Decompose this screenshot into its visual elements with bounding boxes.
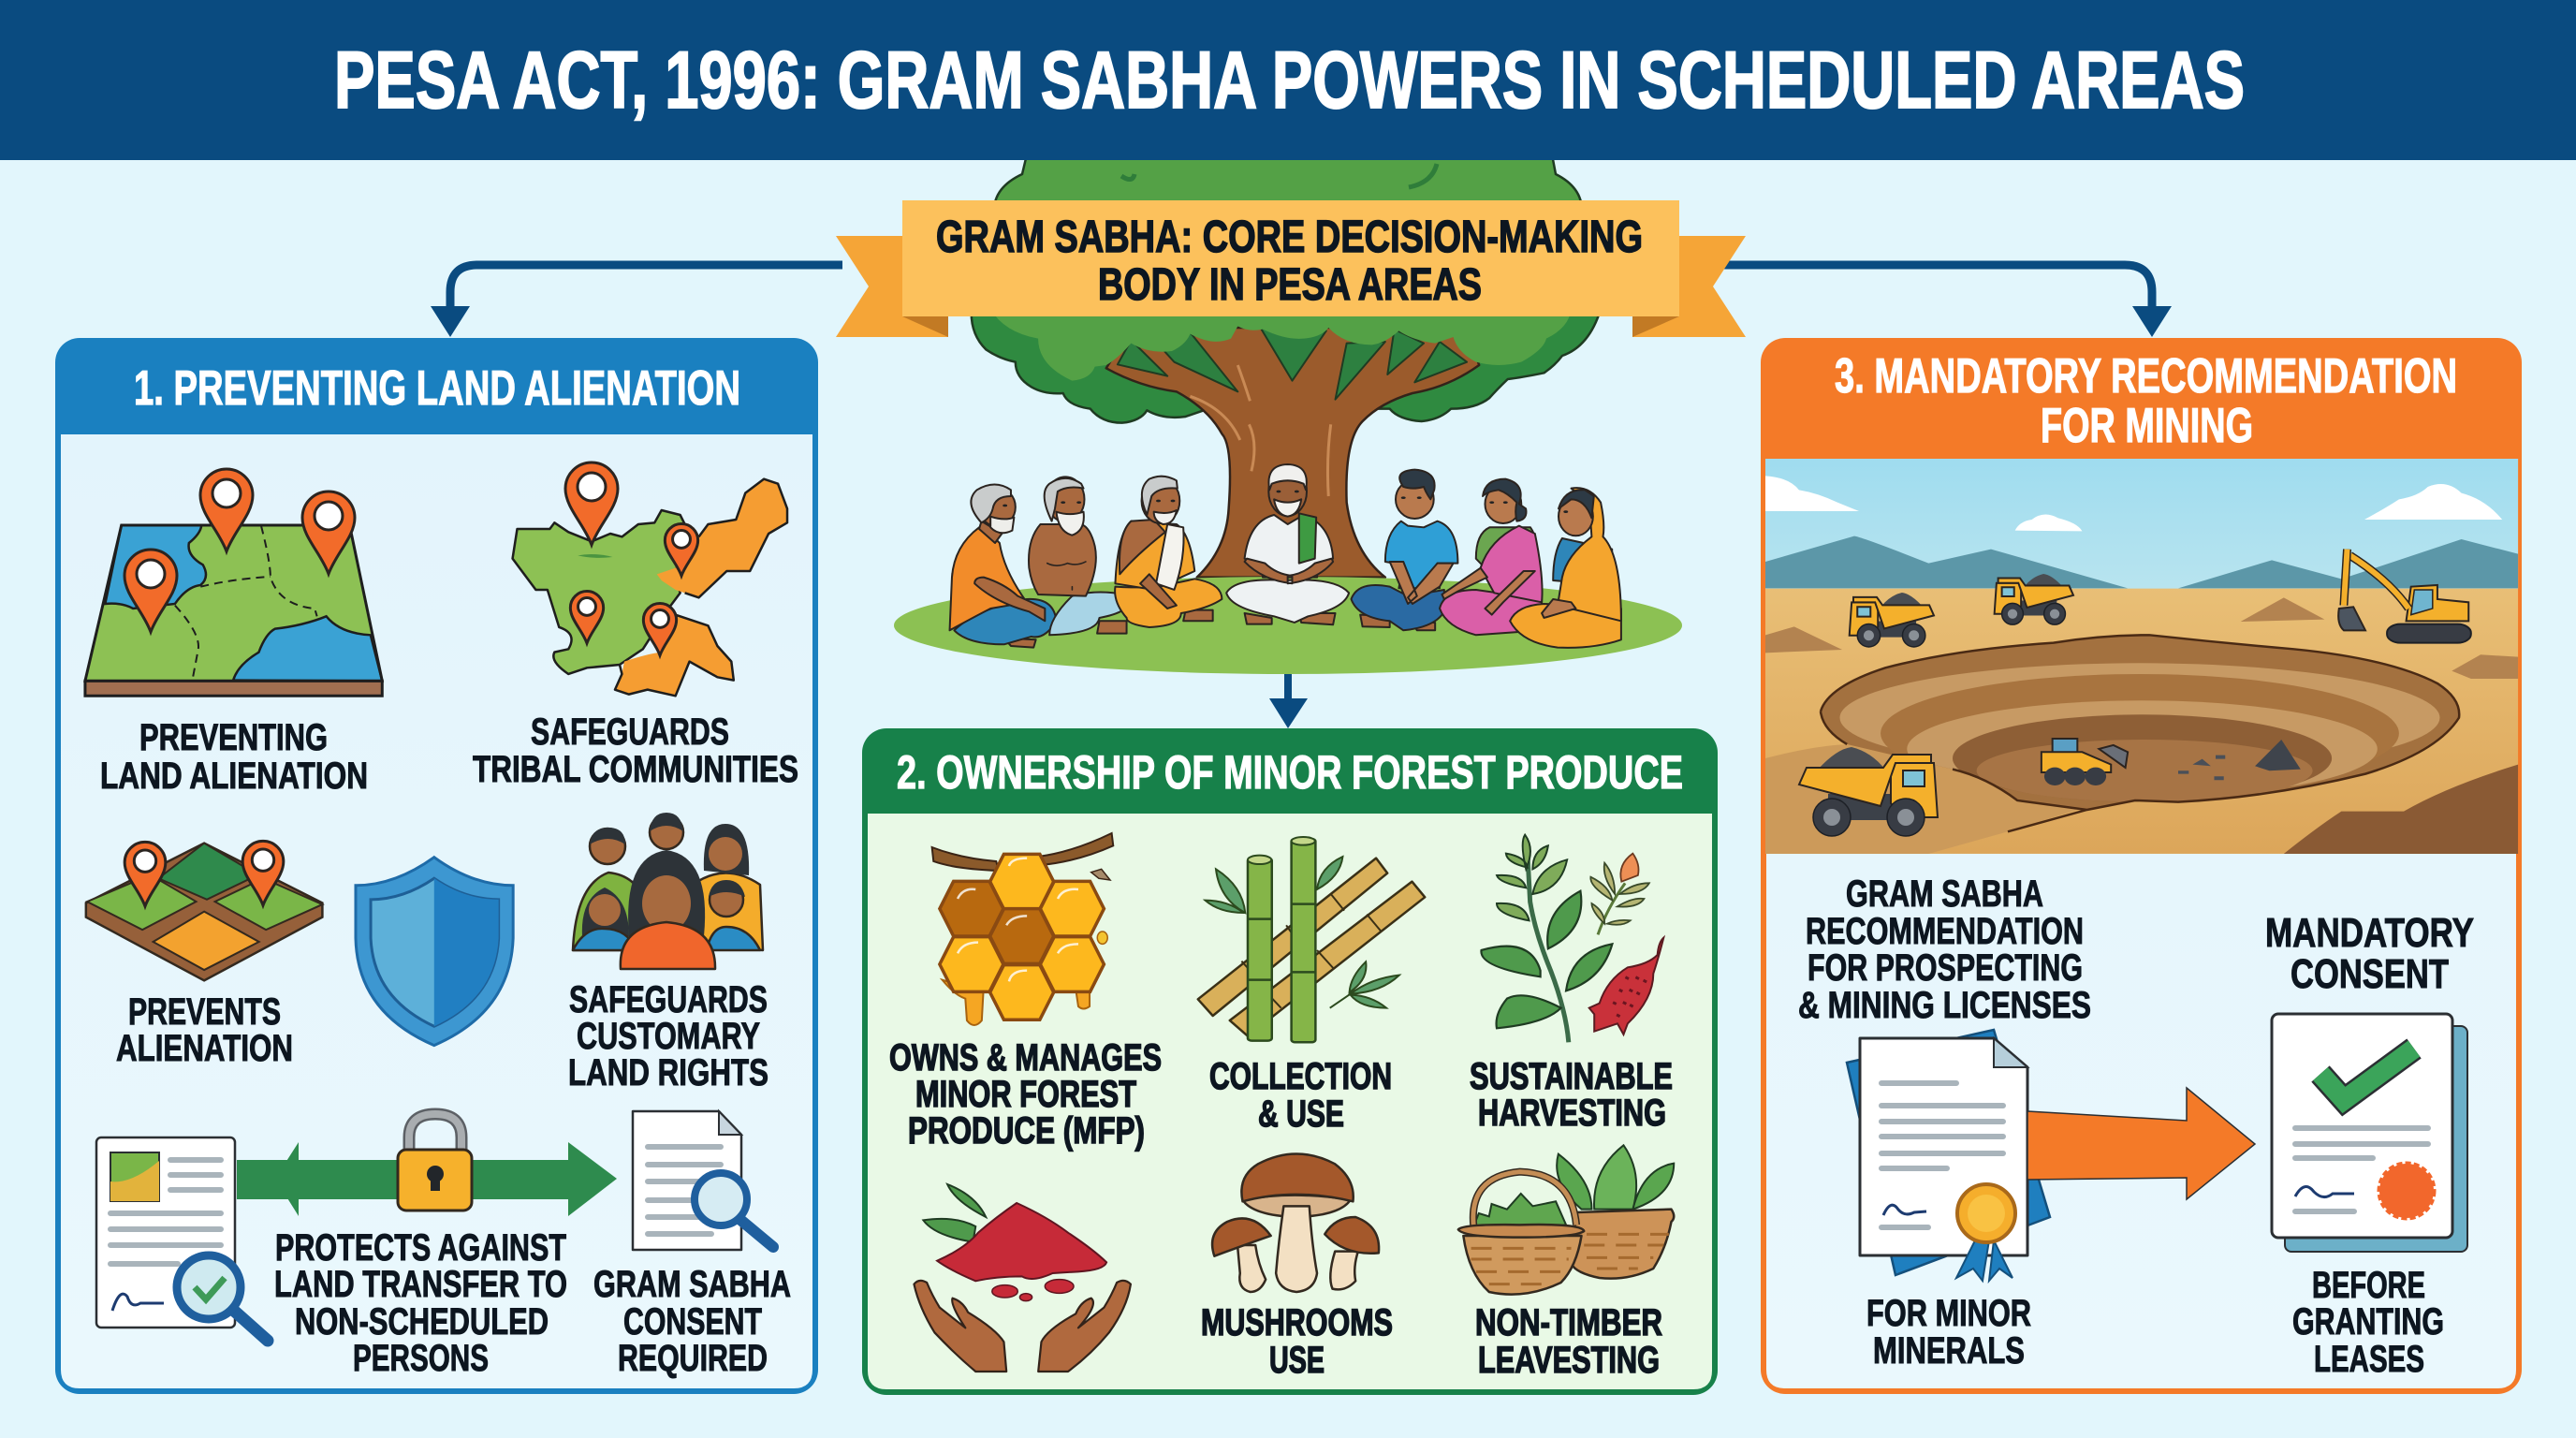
mining scene bbox=[1765, 459, 2518, 854]
excavator bbox=[2338, 550, 2471, 643]
icon: document with magnifier bbox=[633, 1111, 773, 1250]
label: sustainable harvesting: HARVESTING bbox=[1478, 1093, 1666, 1134]
panel 3 heading bbox=[1835, 349, 2457, 453]
person 5 bbox=[1352, 470, 1457, 630]
label: gram sabha recommendation: & MINING LICENSES bbox=[1798, 985, 2091, 1026]
icon: land map with pins bbox=[85, 469, 382, 696]
person 1 bbox=[950, 484, 1056, 648]
icon: land parcels with pins bbox=[86, 841, 322, 980]
label: safeguards tribal communities: SAFEGUARDS bbox=[531, 712, 729, 753]
icon: padlock bbox=[398, 1114, 472, 1211]
panel 2 heading: 2. OWNERSHIP OF MINOR FOREST PRODUCE bbox=[897, 746, 1683, 799]
hills bbox=[1765, 536, 2518, 588]
banner: BODY IN PESA AREAS bbox=[1098, 260, 1482, 310]
label: protects against land transfer: NON-SCHEDULED bbox=[295, 1301, 549, 1343]
label: safeguards customary land rights bbox=[568, 979, 768, 1093]
label: owns and manages mfp: MINOR FOREST bbox=[915, 1074, 1136, 1115]
panel 1 heading: 1. PREVENTING LAND ALIENATION bbox=[134, 361, 740, 416]
label: mushrooms use: MUSHROOMS bbox=[1201, 1302, 1393, 1343]
connector arrow down bbox=[1269, 674, 1308, 728]
label: protects against land transfer bbox=[274, 1227, 567, 1379]
icon: state map with pins bbox=[513, 462, 787, 696]
icon: shield bbox=[356, 858, 513, 1046]
label: preventing land alienation: PREVENTING bbox=[139, 717, 328, 758]
panel 1: preventing land alienation bbox=[55, 338, 818, 1394]
label: gram sabha consent required: GRAM SABHA bbox=[593, 1264, 791, 1305]
label: for minor minerals: MINERALS bbox=[1873, 1330, 2025, 1372]
mounds bbox=[1765, 597, 2518, 679]
label: gram sabha consent required bbox=[593, 1264, 791, 1379]
label: preventing land alienation bbox=[100, 717, 368, 797]
label: sustainable harvesting: SUSTAINABLE bbox=[1470, 1056, 1673, 1097]
icon: document with seal bbox=[1847, 1030, 2050, 1281]
label: safeguards customary land rights: SAFEGUARDS bbox=[569, 979, 768, 1020]
label: non-timber leavesting: NON-TIMBER bbox=[1475, 1302, 1662, 1343]
panel 3: mandatory recommendation for mining bbox=[1761, 338, 2522, 1394]
label: owns and manages mfp: PRODUCE (MFP) bbox=[908, 1110, 1145, 1152]
icon: forest plant and fruit bbox=[1481, 835, 1663, 1042]
gram sabha people group bbox=[950, 464, 1621, 648]
connector arrow left bbox=[431, 265, 842, 337]
label: protects against land transfer: PERSONS bbox=[353, 1338, 489, 1379]
label: gram sabha recommendation: FOR PROSPECTING bbox=[1808, 947, 2083, 989]
connector arrow right bbox=[1722, 265, 2172, 337]
clouds bbox=[1765, 476, 2502, 531]
person 2 bbox=[1029, 477, 1132, 635]
label: mushrooms use: USE bbox=[1269, 1340, 1325, 1381]
label: prevents alienation: ALIENATION bbox=[116, 1028, 293, 1069]
label: prevents alienation bbox=[116, 991, 293, 1069]
label: non-timber leavesting bbox=[1475, 1302, 1662, 1381]
ground ellipse bbox=[894, 577, 1682, 674]
open pit bbox=[1821, 635, 2459, 831]
header bar bbox=[0, 0, 2576, 160]
icon: community people bbox=[573, 813, 763, 969]
label: safeguards customary land rights: CUSTOMARY bbox=[577, 1016, 760, 1057]
arrow: orange bbox=[2027, 1088, 2255, 1199]
icon: land document with magnifier bbox=[96, 1137, 268, 1341]
icon: document with check bbox=[2272, 1014, 2467, 1252]
label: gram sabha consent required: REQUIRED bbox=[618, 1338, 768, 1379]
label: before granting leases: GRANTING bbox=[2292, 1301, 2444, 1343]
person 6 bbox=[1440, 479, 1543, 635]
tree bbox=[972, 154, 1601, 578]
label: protects against land transfer: PROTECTS AGAINST bbox=[275, 1227, 566, 1269]
person 4: central elder bbox=[1226, 464, 1349, 624]
label: safeguards tribal communities bbox=[473, 712, 798, 790]
label: collection and use: & USE bbox=[1258, 1093, 1344, 1135]
label: non-timber leavesting: LEAVESTING bbox=[1478, 1340, 1660, 1381]
truck large bbox=[1799, 747, 1938, 836]
label: collection and use: COLLECTION bbox=[1209, 1056, 1392, 1097]
label: before granting leases: LEASES bbox=[2314, 1339, 2424, 1380]
label: gram sabha recommendation: RECOMMENDATION bbox=[1806, 911, 2084, 952]
icon: honeycomb bbox=[932, 833, 1113, 1025]
icon: bamboo bbox=[1198, 837, 1425, 1042]
foreground rocks bbox=[2284, 765, 2518, 854]
label: owns and manages mfp: OWNS & MANAGES bbox=[889, 1037, 1162, 1078]
label: mandatory consent bbox=[2265, 910, 2474, 997]
label: for minor minerals bbox=[1866, 1293, 2031, 1372]
label: mandatory consent: CONSENT bbox=[2291, 951, 2449, 997]
label: gram sabha recommendation: GRAM SABHA bbox=[1846, 873, 2043, 915]
banner: GRAM SABHA: CORE DECISION-MAKING bbox=[936, 213, 1643, 262]
loader in pit bbox=[2042, 739, 2128, 785]
truck medium left bbox=[1850, 593, 1934, 647]
icon: double arrow bbox=[237, 1142, 617, 1216]
label: sustainable harvesting bbox=[1470, 1056, 1673, 1134]
icon: mushrooms bbox=[1212, 1153, 1379, 1292]
label: protects against land transfer: LAND TRANSFER TO bbox=[274, 1264, 567, 1305]
label: safeguards tribal communities: TRIBAL COMMUNITIES bbox=[473, 749, 798, 790]
label: before granting leases: BEFORE bbox=[2312, 1265, 2425, 1306]
label: for minor minerals: FOR MINOR bbox=[1866, 1293, 2031, 1334]
left sand slope bbox=[1765, 744, 2077, 854]
label: prevents alienation: PREVENTS bbox=[128, 991, 281, 1033]
panel 3 heading: FOR MINING bbox=[2041, 399, 2253, 453]
person 3 bbox=[1115, 477, 1222, 627]
truck medium right bbox=[1995, 574, 2073, 624]
label: gram sabha consent required: CONSENT bbox=[623, 1301, 762, 1343]
icon: baskets of leaves bbox=[1458, 1145, 1674, 1295]
icon: red powder and hands bbox=[914, 1184, 1131, 1372]
label: owns and manages mfp bbox=[889, 1037, 1162, 1152]
label: before granting leases bbox=[2292, 1265, 2444, 1380]
label: preventing land alienation: LAND ALIENATION bbox=[100, 756, 368, 797]
label: gram sabha recommendation bbox=[1798, 873, 2091, 1026]
label: mushrooms use bbox=[1201, 1302, 1393, 1381]
panel 2: ownership of minor forest produce bbox=[862, 728, 1718, 1395]
banner bbox=[836, 200, 1746, 337]
label: mandatory consent: MANDATORY bbox=[2265, 910, 2474, 956]
label: safeguards customary land rights: LAND RIGHTS bbox=[568, 1052, 768, 1093]
label: collection and use bbox=[1209, 1056, 1392, 1135]
person 7 bbox=[1510, 488, 1621, 648]
